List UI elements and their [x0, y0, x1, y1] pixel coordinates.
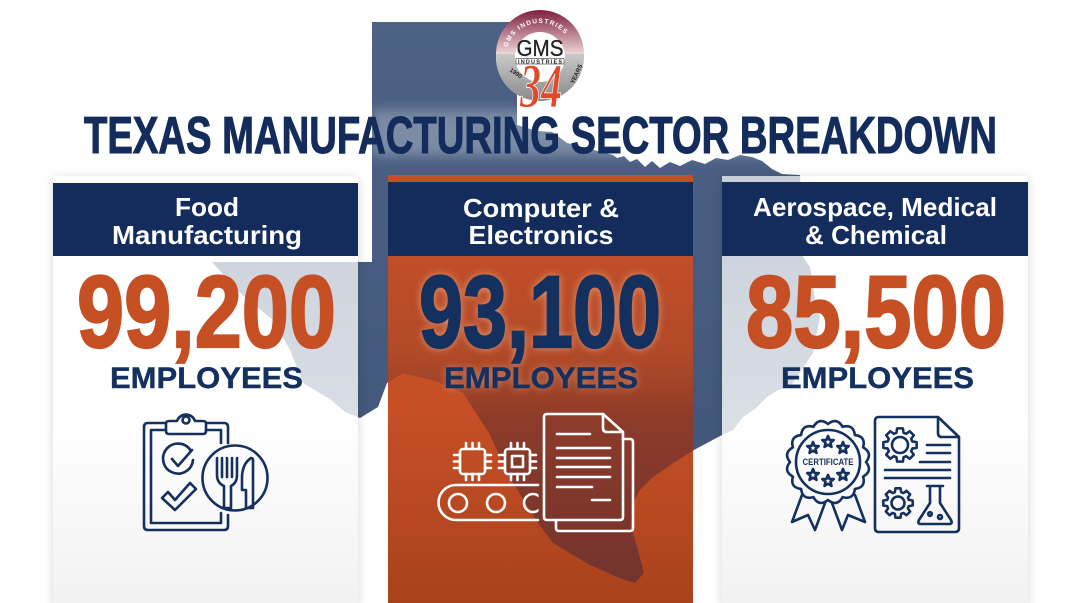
haze behind title over the map — [372, 110, 792, 156]
panel header: food manufacturing — [53, 183, 358, 256]
panel header: aerospace, medical and chemical — [722, 182, 1028, 256]
panel header: aerospace, medical and chemical: Aerospace, Medical — [753, 192, 997, 222]
logo: GMS Industries 34 years — [496, 10, 584, 121]
panel: aerospace, medical and chemical — [722, 176, 1028, 603]
panel: computer and electronics — [388, 175, 693, 603]
panel header: food manufacturing: Manufacturing — [112, 220, 302, 250]
panel header: food manufacturing: Food — [175, 192, 239, 222]
logo: GMS Industries 34 years: GMS — [516, 35, 564, 61]
stat: 99,200: 99,200 — [77, 255, 336, 369]
icon: clipboard with fork and knife — [144, 415, 268, 530]
panel: food manufacturing — [53, 176, 358, 603]
panel header: computer and electronics: Computer & — [463, 193, 619, 223]
logo: GMS Industries 34 years: INDUSTRIES — [518, 60, 562, 66]
logo: GMS Industries 34 years: 34 — [519, 53, 562, 121]
background map: Texas silhouette — [212, 22, 820, 583]
logo: GMS Industries 34 years: YEARS — [570, 64, 584, 85]
panel header: computer and electronics — [388, 182, 693, 256]
label: employees: EMPLOYEES — [781, 362, 974, 395]
stat: 85,500: 85,500 — [746, 255, 1006, 369]
label: employees: EMPLOYEES — [444, 362, 638, 395]
logo: GMS Industries 34 years: GMS INDUSTRIES — [504, 18, 568, 47]
stat: 93,100: 93,100 — [419, 255, 661, 369]
label: employees: EMPLOYEES — [110, 362, 303, 395]
icon: certificate badge — [787, 421, 869, 530]
panel header: aerospace, medical and chemical: & Chemical — [805, 220, 947, 250]
panel header: computer and electronics: Electronics — [468, 220, 614, 250]
icon: document with gears and flask — [875, 417, 959, 532]
icon: chips on conveyor with documents — [438, 414, 633, 531]
icon: certificate badge: CERTIFICATE — [802, 457, 854, 468]
logo: GMS Industries 34 years: 1990 — [508, 68, 523, 80]
